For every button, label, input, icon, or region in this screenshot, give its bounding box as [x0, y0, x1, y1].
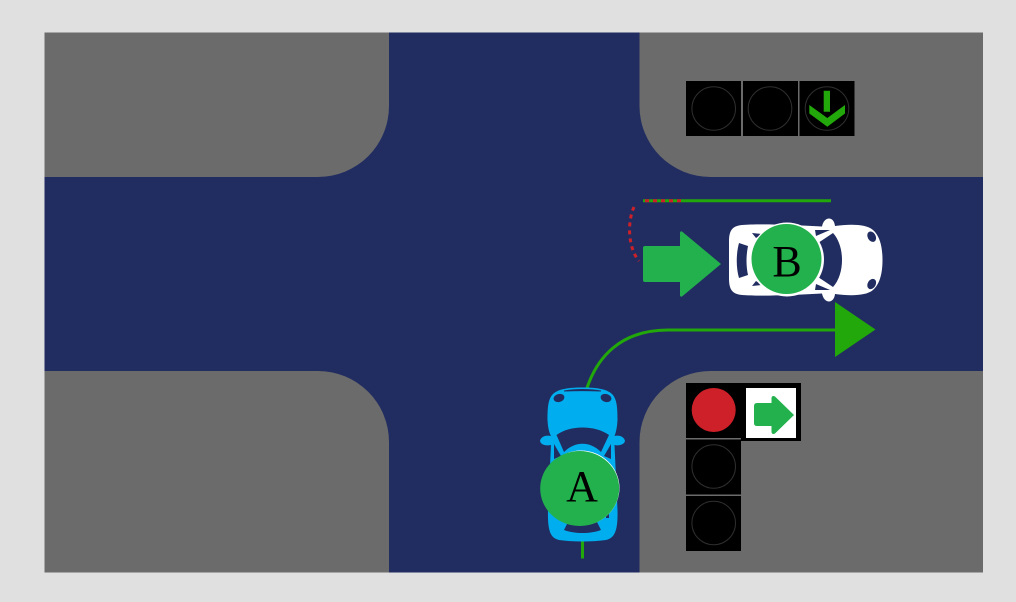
car A windows and lights	[553, 390, 612, 533]
signal: green right-arrow filter light	[741, 383, 801, 441]
label badge: B	[750, 222, 824, 296]
panel: bottom-right corner block	[640, 371, 983, 572]
label badge: A	[540, 450, 620, 526]
panel: bottom-left corner block	[44, 371, 389, 572]
car B windows and lights	[737, 230, 878, 291]
arrow: large green arrow for car B	[643, 231, 721, 297]
signal: vertical traffic light with red light	[686, 383, 741, 551]
arrow: green turning path for car A	[582, 302, 876, 558]
panel: top-left corner block	[44, 32, 389, 177]
icon: green right arrow	[754, 396, 794, 434]
panel: top-right corner block	[640, 32, 983, 177]
signal: horizontal traffic light with green down arrow	[686, 81, 854, 136]
label badge: A: A	[566, 462, 598, 511]
label badge: B: B	[772, 237, 802, 286]
path line: car B green route with red dashes	[630, 201, 831, 261]
icon: green down arrow	[809, 91, 845, 127]
car B: white car facing right	[729, 219, 882, 301]
car A: blue car facing up	[540, 388, 625, 542]
